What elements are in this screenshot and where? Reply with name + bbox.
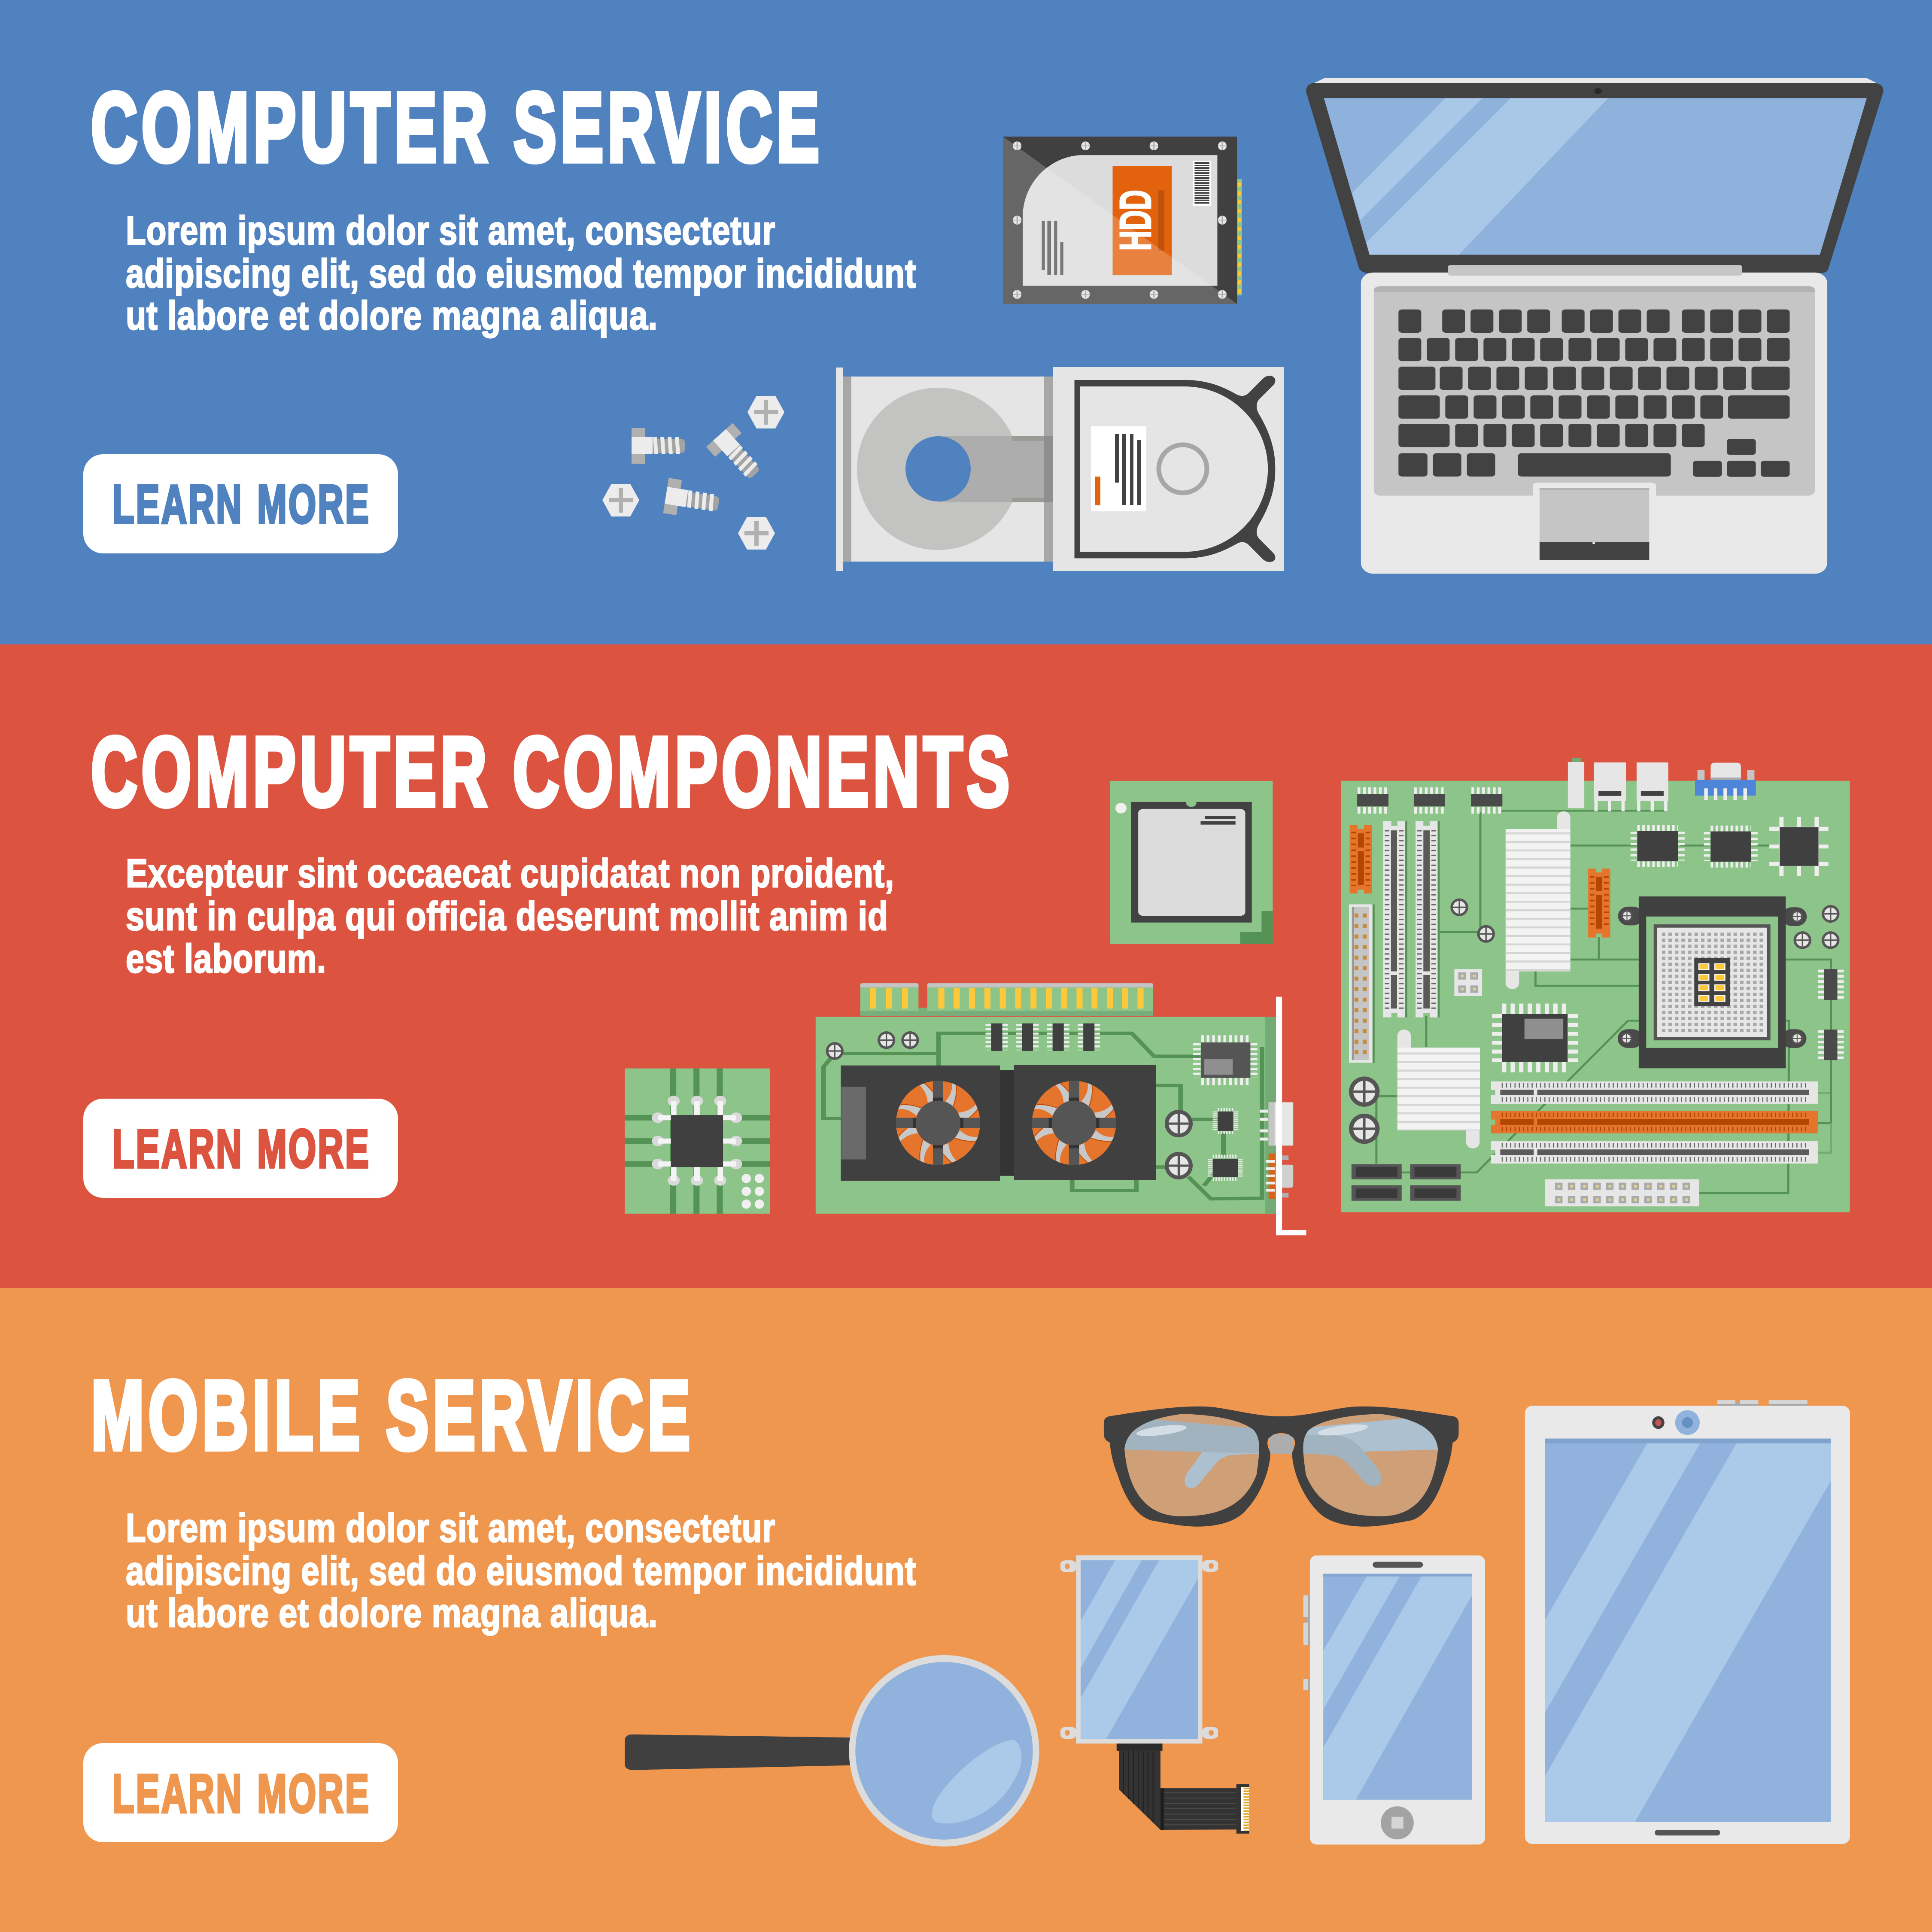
orange connectors <box>1350 825 1610 938</box>
text block: components description: sunt in culpa qui officia deserunt mollit anim id <box>126 893 888 939</box>
icon: hard disk drive: HDD <box>1111 190 1160 251</box>
keyboard keys <box>1398 310 1790 477</box>
right lens <box>1303 1414 1438 1516</box>
sata ports <box>1352 1164 1461 1201</box>
top rear ports <box>1568 758 1756 811</box>
icon: microchip board <box>625 1069 770 1214</box>
icon: smartphone <box>1303 1555 1485 1844</box>
heading: computer components: COMPUTER COMPONENTS <box>91 717 1014 826</box>
icon: phone display with ribbon cable <box>1060 1555 1249 1834</box>
button: learn more blue <box>83 454 398 553</box>
text block: mobile description: ut labore et dolore magna aliqua. <box>126 1590 658 1635</box>
icon: graphics card <box>816 983 1306 1235</box>
text block: service description: ut labore et dolore magna aliqua. <box>126 293 658 338</box>
icon: processor <box>1110 781 1273 944</box>
icon: motherboard <box>1341 758 1850 1212</box>
button: learn more orange: LEARN MORE <box>112 1763 371 1824</box>
icon: tablet <box>1525 1400 1850 1844</box>
ide connector <box>1349 904 1375 1063</box>
icon: laptop <box>1306 78 1883 574</box>
icon: glasses <box>1104 1406 1458 1527</box>
icon: screws and bolts <box>602 396 784 550</box>
heat sinks <box>1397 811 1571 1148</box>
icon: hard disk drive <box>1003 137 1242 304</box>
text block: mobile description: adipiscing elit, sed do eiusmod tempor incididunt <box>126 1548 916 1593</box>
text block: service description <box>126 208 916 338</box>
mounting screws <box>1349 899 1839 1144</box>
chipset <box>1497 1009 1573 1067</box>
text block: service description: Lorem ipsum dolor sit amet, consectetur <box>126 208 775 253</box>
left lens <box>1124 1414 1259 1516</box>
panel: mobile service <box>0 1288 1932 1932</box>
cpu socket <box>1618 896 1807 1068</box>
icon: magnifying glass <box>625 1655 1039 1847</box>
small chips <box>1357 791 1841 1060</box>
text block: components description <box>126 851 894 981</box>
text block: service description: adipiscing elit, sed do eiusmod tempor incididunt <box>126 251 916 296</box>
button: learn more orange <box>83 1743 398 1842</box>
panel: computer service <box>0 0 1932 644</box>
text block: components description: est laborum. <box>126 936 326 981</box>
text block: mobile description: Lorem ipsum dolor sit amet, consectetur <box>126 1505 775 1550</box>
four pin header <box>1454 969 1482 996</box>
heading: mobile service: MOBILE SERVICE <box>91 1361 694 1470</box>
text block: components description: Excepteur sint occaecat cupidatat non proident, <box>126 851 894 896</box>
bottom pin header <box>1545 1179 1699 1206</box>
heading: computer service: COMPUTER SERVICE <box>91 73 823 182</box>
white expansion slots <box>1383 821 1440 1018</box>
memory slots <box>1491 1081 1818 1163</box>
button: learn more red <box>83 1099 398 1198</box>
text block: mobile description <box>126 1505 916 1635</box>
button: learn more blue: LEARN MORE <box>112 474 371 535</box>
icon: open hard drive <box>1053 367 1284 571</box>
panel: computer components <box>0 644 1932 1288</box>
icon: optical drive <box>836 368 1053 571</box>
button: learn more red: LEARN MORE <box>112 1118 371 1179</box>
circuit traces <box>1376 811 1831 1193</box>
